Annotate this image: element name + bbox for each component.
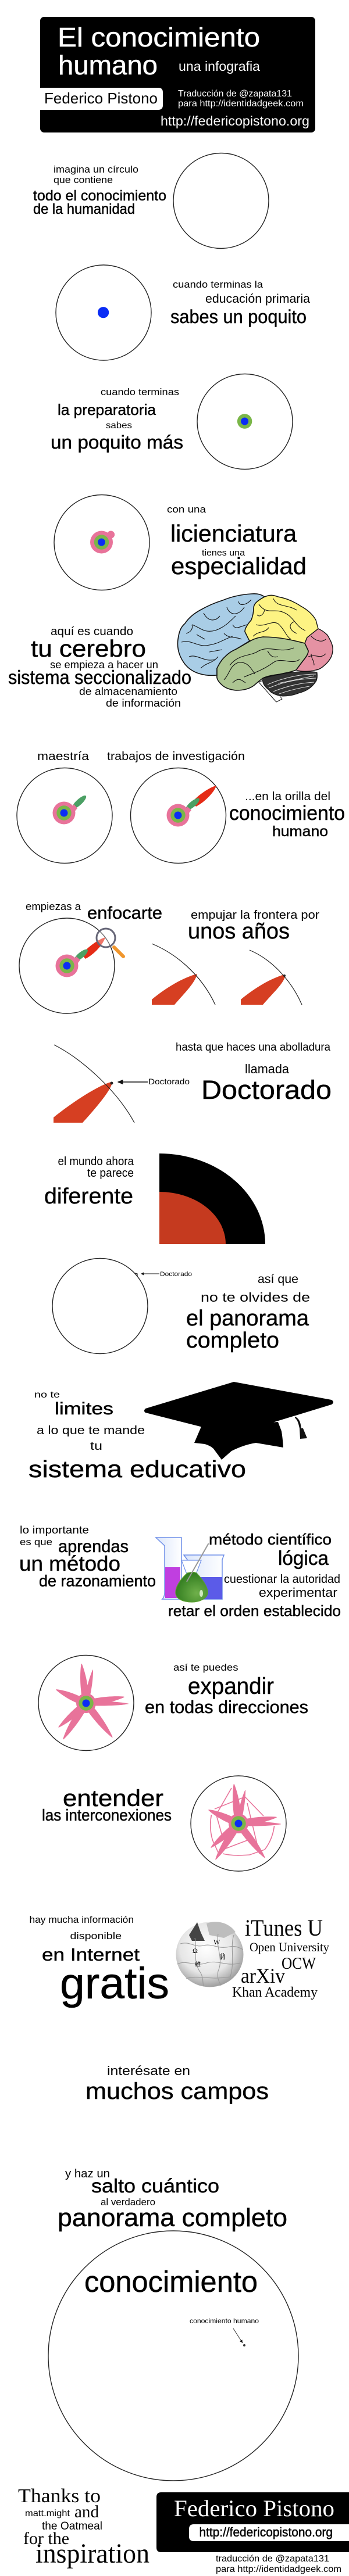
icon: graduation cap	[144, 1382, 333, 1460]
brain stem	[258, 680, 282, 702]
text block: expandir: expandir	[188, 1674, 274, 1699]
circle with green ring	[197, 374, 293, 470]
icon: wikipedia globe: Ω	[193, 1947, 198, 1955]
text block: todo el conocimiento: de la humanidad	[33, 201, 135, 217]
translation credit: Traducción de @zapata131	[178, 89, 292, 99]
text block: entender	[42, 1786, 172, 1824]
icon: wikipedia globe: 維	[195, 1961, 201, 1968]
text block: un poquito mas: cuando terminas	[101, 386, 179, 397]
translation credit	[178, 89, 304, 109]
resource names	[232, 1915, 329, 2000]
text block: metodo cientifico list: lógica	[278, 1547, 329, 1570]
text block: hasta que: llamada	[245, 1062, 290, 1076]
text block: diferente: te parece	[87, 1167, 134, 1180]
text block: un metodo	[19, 1524, 156, 1590]
circle with pink ring	[54, 495, 149, 590]
panel: footer author	[156, 2492, 349, 2552]
author pill	[40, 88, 163, 110]
text block: no te limites: no te	[34, 1390, 60, 1400]
text block: todo el conocimiento: todo el conocimiento	[33, 188, 166, 204]
text block: el panorama completo: no te olvides de	[201, 1290, 310, 1305]
text block: todo el conocimiento: imagina un círculo	[54, 164, 138, 175]
footer url: http://federicopistono.org	[199, 2525, 333, 2539]
text block: sabes un poquito: educación primaria	[205, 292, 310, 306]
text block: diferente: diferente	[44, 1184, 133, 1209]
beaker	[184, 1555, 224, 1599]
credits: thanks: the Oatmeal	[42, 2520, 102, 2532]
translation credit: para http://identidadgeek.com	[178, 99, 304, 109]
icon: wikipedia globe: Й	[220, 1952, 225, 1961]
section: bachelor's	[54, 495, 307, 590]
footer translation credit	[216, 2554, 341, 2574]
text block: metodo cientifico list: experimentar	[259, 1585, 337, 1600]
text block: un poquito mas	[51, 386, 183, 453]
text block: hasta que	[176, 1041, 332, 1105]
label: conocimiento: conocimiento	[84, 2265, 258, 2298]
resource names: Khan Academy	[232, 1985, 318, 2000]
footer translation credit: para http://identidadgeek.com	[216, 2564, 341, 2574]
occipital lobe	[296, 629, 333, 671]
brain folds	[181, 599, 326, 683]
section: brain	[8, 594, 333, 709]
text block: un poquito mas: sabes	[106, 421, 132, 431]
text block: diferente	[44, 1155, 134, 1209]
text: empiezas a enfocarte: enfocarte	[87, 904, 162, 923]
section: doctorate	[54, 1041, 332, 1123]
section: expand	[38, 1655, 308, 1750]
title: El conocimiento	[58, 22, 260, 52]
text block: expandir: así te puedes	[173, 1662, 238, 1673]
panel: header	[40, 17, 315, 132]
text block: sabes un poquito: sabes un poquito	[170, 306, 307, 327]
section: primary education	[56, 265, 310, 360]
text block: diferente: el mundo ahora	[58, 1155, 134, 1168]
circle with magnifier	[19, 918, 123, 1013]
section: interconnections	[42, 1776, 286, 1871]
text block: tu cerebro: de almacenamiento	[79, 686, 177, 697]
author name: Federico Pistono	[44, 89, 158, 107]
text block: panorama completo: panorama completo	[58, 2204, 287, 2232]
text: empujar la frontera: empujar la frontera por	[191, 909, 319, 922]
title line 2: humano	[58, 50, 158, 80]
section: imagine a circle	[33, 153, 269, 249]
text block: un poquito mas: un poquito más	[51, 432, 183, 453]
text block: gratis: disponible	[70, 1930, 122, 1941]
text block: muchos campos: muchos campos	[86, 2079, 269, 2104]
text block: en la orilla	[229, 790, 345, 840]
text block: muchos campos	[86, 2063, 269, 2104]
circle: masters	[17, 768, 112, 864]
section: focus	[19, 901, 319, 1013]
text block: un metodo: lo importante	[20, 1524, 89, 1536]
text block: tu cerebro: sistema seccionalizado	[8, 667, 191, 688]
circle: research	[130, 768, 226, 864]
text block: en la orilla: ...en la orilla del	[245, 790, 330, 803]
footer url pill	[189, 2524, 349, 2541]
icon: wikipedia globe	[176, 1922, 243, 1987]
section: learn a method	[19, 1524, 341, 1620]
label: trabajos de investigacion: trabajos de investigación	[107, 750, 245, 763]
text block: en la orilla: conocimiento	[229, 802, 345, 825]
quarter circle chart	[159, 1153, 265, 1244]
text block: un metodo: un método	[19, 1552, 120, 1575]
section: education system	[29, 1382, 333, 1482]
text block: el panorama completo: el panorama	[186, 1306, 309, 1331]
text: empiezas a enfocarte	[26, 901, 162, 923]
text block: un metodo: aprendas	[58, 1537, 129, 1556]
text block: metodo cientifico list: retar el orden establecido	[168, 1602, 341, 1620]
zoomed boundary 1	[152, 944, 215, 1005]
footer translation credit: traducción de @zapata131	[216, 2554, 329, 2564]
frontal lobe	[178, 594, 265, 675]
resource names: arXiv	[241, 1964, 285, 1987]
circle with connected petals	[191, 1776, 286, 1871]
resource names: iTunes U	[245, 1915, 323, 1941]
text block: panorama completo	[58, 2167, 287, 2232]
text block: no te limites	[29, 1390, 246, 1482]
text block: gratis: en Internet	[42, 1944, 140, 1965]
text block: un poquito mas: la preparatoria	[58, 401, 156, 418]
temporal lobe	[217, 637, 308, 690]
text block: panorama completo: y haz un	[65, 2167, 110, 2180]
text block: no te limites: tu	[90, 1440, 102, 1453]
section: masters and research	[17, 750, 345, 864]
label: maestria: maestría	[37, 750, 90, 763]
text block: panorama completo: salto cuántico	[91, 2175, 219, 2197]
arrow to small doctorate	[141, 1273, 159, 1274]
credits: thanks: matt.might	[25, 2509, 70, 2518]
icon: magnifying glass	[97, 929, 123, 956]
text block: tu cerebro	[8, 625, 191, 709]
text block: expandir	[145, 1662, 308, 1717]
icon: laboratory flasks	[156, 1538, 224, 1602]
text block: tu cerebro: tu cerebro	[31, 635, 146, 662]
circle with blue dot	[56, 265, 151, 360]
text block: hasta que: hasta que haces una abolladura	[176, 1041, 330, 1054]
cerebellum	[263, 671, 317, 696]
text block: el panorama completo	[186, 1273, 310, 1353]
text block: entender: entender	[63, 1786, 163, 1811]
header url: http://federicopistono.org	[161, 113, 309, 128]
green flask	[176, 1543, 209, 1602]
credits: thanks: and	[74, 2502, 99, 2521]
text block: en la orilla: humano	[272, 823, 328, 840]
circle: all knowledge	[173, 153, 269, 249]
text block: sabes un poquito: cuando terminas la	[173, 279, 263, 290]
text block: no te limites: limites	[55, 1399, 113, 1418]
icon: wikipedia globe: W	[213, 1938, 220, 1946]
text block: tu cerebro: se empieza a hacer un	[50, 659, 158, 671]
arrow to human knowledge	[233, 2328, 243, 2343]
text block: licenciatura especialidad: con una	[167, 504, 206, 515]
text block: panorama completo: al verdadero	[101, 2197, 155, 2208]
text block: gratis: gratis	[60, 1959, 169, 2008]
resource names: OCW	[282, 1955, 316, 1973]
text block: todo el conocimiento	[33, 164, 166, 217]
human knowledge dot	[243, 2344, 245, 2346]
text block: licenciatura especialidad	[167, 504, 307, 579]
section: quantum leap	[48, 2167, 298, 2481]
text: empiezas a enfocarte: empiezas a	[26, 901, 81, 912]
footer author name: Federico Pistono	[174, 2495, 334, 2521]
text block: tu cerebro: aquí es cuando	[51, 625, 133, 638]
text block: metodo cientifico list: método científico	[209, 1531, 332, 1548]
resource names: Open University	[250, 1940, 329, 1954]
text block: licenciatura especialidad: especialidad	[171, 553, 307, 579]
section: world looks different	[44, 1153, 265, 1244]
text block: licenciatura especialidad: tienes una	[202, 548, 245, 558]
text: empujar la frontera: unos años	[188, 919, 290, 944]
text block: no te limites: sistema educativo	[29, 1456, 246, 1482]
section: big picture	[52, 1259, 310, 1354]
text block: tu cerebro: de información	[106, 697, 181, 709]
text block: no te limites: a lo que te mande	[37, 1424, 145, 1437]
label: small doctorado: Doctorado	[160, 1271, 192, 1278]
text block: todo el conocimiento: que contiene	[54, 174, 113, 185]
label: doctorado: Doctorado	[148, 1077, 190, 1086]
text block: metodo cientifico list: cuestionar la autoridad	[224, 1573, 340, 1586]
text block: licenciatura especialidad: licienciatura	[170, 520, 297, 547]
text block: un metodo: es que	[20, 1536, 52, 1547]
credits: thanks	[18, 2485, 149, 2569]
credits: thanks: for the	[23, 2529, 69, 2548]
text block: entender: las interconexiones	[42, 1806, 172, 1824]
zoomed boundary 2	[241, 950, 302, 1005]
text block: un metodo: de razonamiento	[39, 1572, 156, 1590]
circle with petals	[38, 1655, 134, 1750]
text block: hasta que: Doctorado	[201, 1075, 332, 1105]
section: high school	[51, 374, 293, 470]
text block: expandir: en todas direcciones	[145, 1697, 308, 1717]
text block: el panorama completo: así que	[258, 1273, 298, 1286]
circle with doctorate marker	[52, 1259, 148, 1354]
text: empujar la frontera	[188, 909, 319, 944]
big knowledge circle	[48, 2231, 298, 2481]
credits: thanks: Thanks to	[18, 2485, 101, 2507]
icon: brain	[178, 594, 333, 702]
text block: el panorama completo: completo	[186, 1328, 279, 1353]
text block: sabes un poquito	[170, 279, 310, 327]
zoomed boundary with bump	[54, 1045, 134, 1123]
label: conocimiento humano: conocimiento humano	[190, 2317, 259, 2325]
arrow to doctorate	[118, 1081, 148, 1083]
credits: thanks: inspiration	[35, 2538, 149, 2569]
section: free online	[29, 1914, 329, 2008]
subtitle: una infografia	[179, 59, 260, 74]
text block: gratis: hay mucha información	[29, 1914, 134, 1925]
text block: gratis	[29, 1914, 169, 2008]
graduated cylinder	[156, 1538, 181, 1599]
text block: metodo cientifico list	[168, 1531, 341, 1620]
parietal lobe	[245, 595, 318, 643]
text block: muchos campos: interésate en	[107, 2063, 190, 2078]
